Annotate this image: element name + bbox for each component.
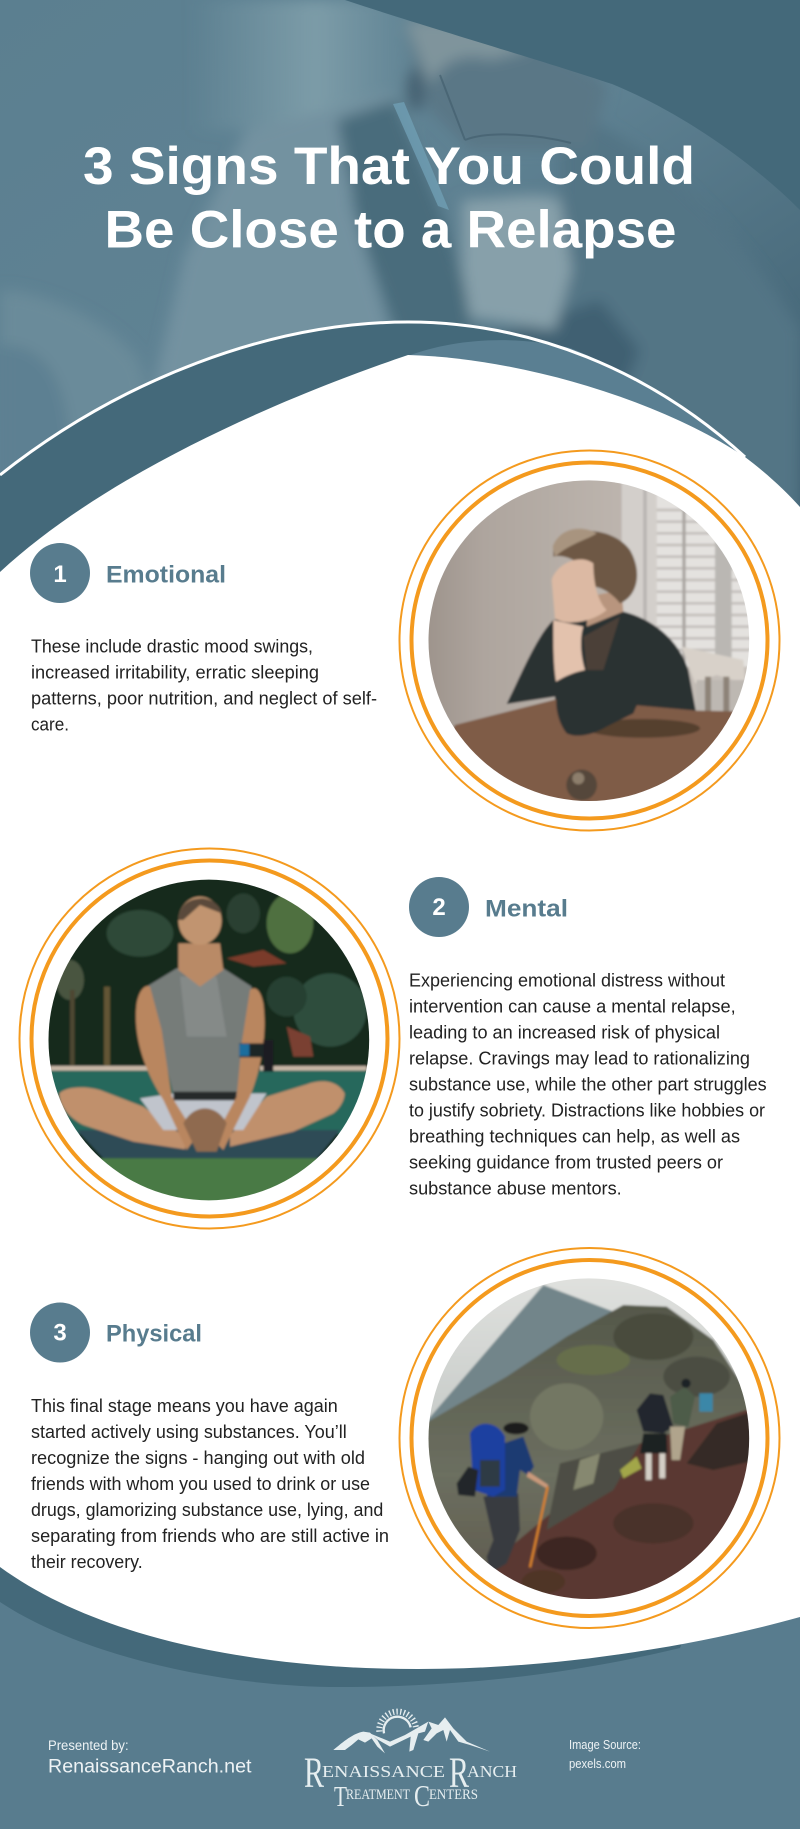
footer: presented by: Presented by: bbox=[48, 1738, 129, 1753]
white arc line bbox=[0, 322, 745, 475]
text: emotional: care. bbox=[31, 715, 69, 735]
logo wordmark: R bbox=[304, 1750, 324, 1797]
text: mental: relapse. Cravings may lead to rationalizing bbox=[409, 1049, 750, 1069]
photo 3: hikers with rings bbox=[400, 1248, 780, 1628]
text: mental: leading to an increased risk of physical bbox=[409, 1023, 720, 1043]
text: mental: breathing techniques can help, as well as bbox=[409, 1127, 740, 1147]
badge 1: 1 bbox=[53, 561, 67, 588]
text: mental: intervention can cause a mental relapse, bbox=[409, 997, 736, 1017]
footer: image source: pexels.com bbox=[569, 1757, 626, 1771]
logo wordmark: ANCH bbox=[467, 1762, 517, 1781]
title: 3 Signs That You Could bbox=[83, 137, 695, 196]
footer: image source bbox=[569, 1738, 641, 1771]
top lighter swoosh bbox=[408, 340, 745, 470]
top dark swoosh bbox=[0, 322, 745, 600]
logo wordmark: R bbox=[449, 1750, 469, 1797]
badge 2 bbox=[409, 877, 469, 937]
text: emotional bbox=[31, 637, 377, 735]
text: mental: substance use, while the other part struggles bbox=[409, 1075, 767, 1095]
section 1: emotional bbox=[30, 543, 377, 735]
text: physical: their recovery. bbox=[31, 1552, 143, 1572]
logo wordmark: ENAISSANCE bbox=[322, 1762, 445, 1781]
badge 2: 2 bbox=[432, 894, 446, 921]
hero photo: worried man bbox=[0, 0, 800, 530]
top right dark band bbox=[345, 0, 800, 210]
footer: image source: Image Source: bbox=[569, 1738, 641, 1752]
logo wordmark: REATMENT bbox=[346, 1787, 410, 1803]
text: physical: friends with whom you used to drink or use bbox=[31, 1474, 370, 1494]
section 3: physical bbox=[30, 1302, 389, 1572]
photo 1: man at table with rings bbox=[400, 450, 780, 830]
heading: emotional: Emotional bbox=[106, 561, 226, 588]
logo wordmark: T bbox=[334, 1782, 347, 1813]
text: physical bbox=[31, 1396, 389, 1572]
footer: presented by: RenaissanceRanch.net bbox=[48, 1757, 252, 1778]
title bbox=[83, 137, 695, 260]
icon: mountains and sun bbox=[333, 1712, 490, 1753]
photo 2: man meditating with rings bbox=[20, 848, 400, 1228]
text: physical: recognize the signs - hanging out with old bbox=[31, 1448, 365, 1468]
section 2: mental bbox=[409, 877, 767, 1199]
text: physical: drugs, glamorizing substance use, lying, and bbox=[31, 1500, 383, 1520]
footer: logo bbox=[304, 1712, 517, 1813]
footer: presented by bbox=[48, 1738, 252, 1778]
badge 3 bbox=[30, 1302, 90, 1362]
text: mental: to justify sobriety. Distractions like hobbies or bbox=[409, 1101, 765, 1121]
text: emotional: patterns, poor nutrition, and neglect of self- bbox=[31, 689, 377, 709]
title: Be Close to a Relapse bbox=[104, 200, 676, 260]
text: physical: separating from friends who are still active in bbox=[31, 1526, 389, 1546]
logo wordmark bbox=[304, 1750, 517, 1813]
text: emotional: increased irritability, erratic sleeping bbox=[31, 663, 319, 683]
heading: physical: Physical bbox=[106, 1321, 202, 1348]
badge 1 bbox=[30, 543, 90, 603]
badge 3: 3 bbox=[53, 1320, 67, 1346]
text: physical: This final stage means you have again bbox=[31, 1396, 338, 1416]
logo wordmark: C bbox=[414, 1778, 430, 1813]
footer background bbox=[0, 1540, 800, 1829]
text: emotional: These include drastic mood swings, bbox=[31, 637, 313, 657]
text: mental bbox=[409, 971, 767, 1199]
text: mental: Experiencing emotional distress without bbox=[409, 971, 725, 991]
text: mental: substance abuse mentors. bbox=[409, 1179, 622, 1199]
lower dark swoosh bbox=[0, 1540, 700, 1687]
logo wordmark: ENTERS bbox=[429, 1787, 478, 1803]
text: mental: seeking guidance from trusted peers or bbox=[409, 1153, 723, 1173]
text: physical: started actively using substances. You’ll bbox=[31, 1422, 347, 1442]
white content panel bbox=[0, 355, 800, 1669]
heading: mental: Mental bbox=[485, 896, 568, 923]
